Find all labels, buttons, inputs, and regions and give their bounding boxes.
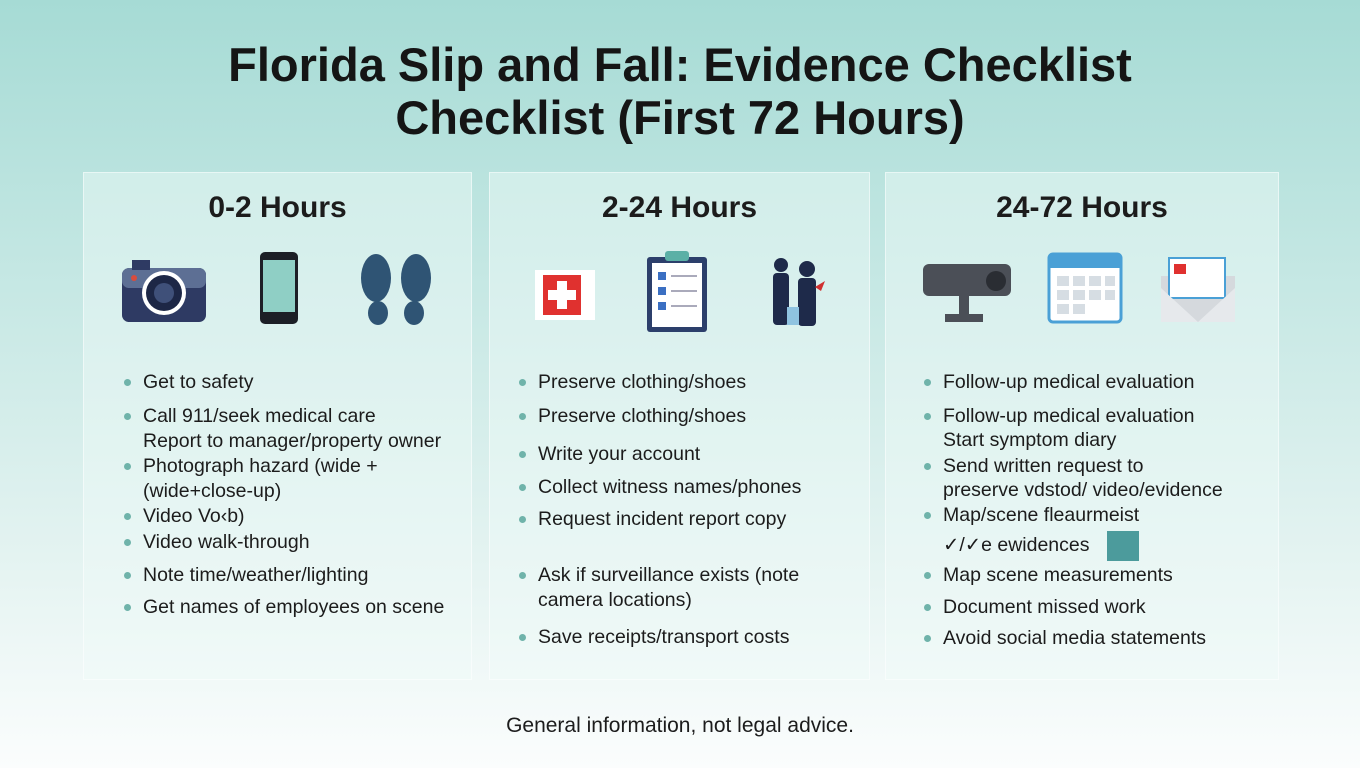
checklist (924, 371, 1223, 649)
panel: 24-72 hours: Avoid social media statements (943, 627, 1206, 649)
heading: 2-24 Hours (602, 191, 757, 224)
icons (535, 251, 825, 332)
panel: 2-24 hours: Preserve clothing/shoes (538, 371, 746, 393)
title (228, 38, 1132, 144)
panel: 0-2 hours: Video walk-through (143, 531, 310, 553)
panel: 2-24 hours: Write your account (538, 443, 700, 465)
icon: witnesses (773, 258, 825, 326)
panel: 24-72 hours: Start symptom diary (943, 429, 1116, 451)
checklist (124, 371, 444, 618)
panel: 0-2 hours: Note time/weather/lighting (143, 564, 368, 586)
heading: 24-72 Hours (996, 191, 1168, 224)
panel: 2-24 hours: Request incident report copy (538, 508, 786, 530)
panel: 24-72 hours: ✓/✓e ewidences (943, 534, 1090, 556)
panel: 0-2 hours: Call 911/seek medical care (143, 405, 376, 427)
panel: 2-24 hours: Ask if surveillance exists (note (538, 564, 799, 586)
title: Florida Slip and Fall: Evidence Checklist (228, 38, 1132, 91)
panel: 0-2 hours: (wide+close-up) (143, 480, 281, 502)
panel: 24-72 hours: Map scene measurements (943, 564, 1173, 586)
icons (122, 252, 431, 325)
icons (923, 252, 1235, 324)
panel: 0-2 hours: Video Vo‹b) (143, 505, 245, 527)
panel: 24-72 hours: Follow-up medical evaluation (943, 371, 1194, 393)
panel: 0-2 hours: Report to manager/property owner (143, 430, 441, 452)
checklist (519, 371, 801, 648)
icon: phone (260, 252, 298, 324)
icon: first aid (535, 270, 595, 320)
panel: 0-2 hours: Get names of employees on scene (143, 596, 444, 618)
panel: 0-2 hours: Photograph hazard (wide + (143, 455, 378, 477)
panel: 24-72 hours: Map/scene fleaurmeist (943, 504, 1139, 526)
panel: 0-2 hours: Get to safety (143, 371, 254, 393)
icon: envelope (1161, 258, 1235, 322)
panel: 24-72 hours: preserve vdstod/ video/evidence (943, 479, 1223, 501)
panel: 2-24 hours (489, 172, 870, 680)
panel: 24-72 hours: Document missed work (943, 596, 1146, 618)
panel: 24-72 hours: Send written request to (943, 455, 1144, 477)
icon: calendar (1049, 254, 1121, 322)
icon: footprints (361, 254, 431, 325)
panel: 2-24 hours: camera locations) (538, 589, 692, 611)
icon: surveillance camera (923, 264, 1011, 322)
panel: 2-24 hours: Save receipts/transport costs (538, 626, 789, 648)
icon: clipboard (647, 251, 707, 332)
panel: 24-72 hours: Follow-up medical evaluation (943, 405, 1194, 427)
panel: 2-24 hours: Preserve clothing/shoes (538, 405, 746, 427)
footer disclaimer: General information, not legal advice. (506, 714, 854, 737)
panel: 0-2 hours (83, 172, 472, 680)
panel: 24-72 hours (885, 172, 1279, 680)
heading: 0-2 Hours (208, 191, 347, 224)
icon: camera (122, 260, 206, 322)
title: Checklist (First 72 Hours) (395, 91, 965, 144)
panel: 2-24 hours: Collect witness names/phones (538, 476, 801, 498)
